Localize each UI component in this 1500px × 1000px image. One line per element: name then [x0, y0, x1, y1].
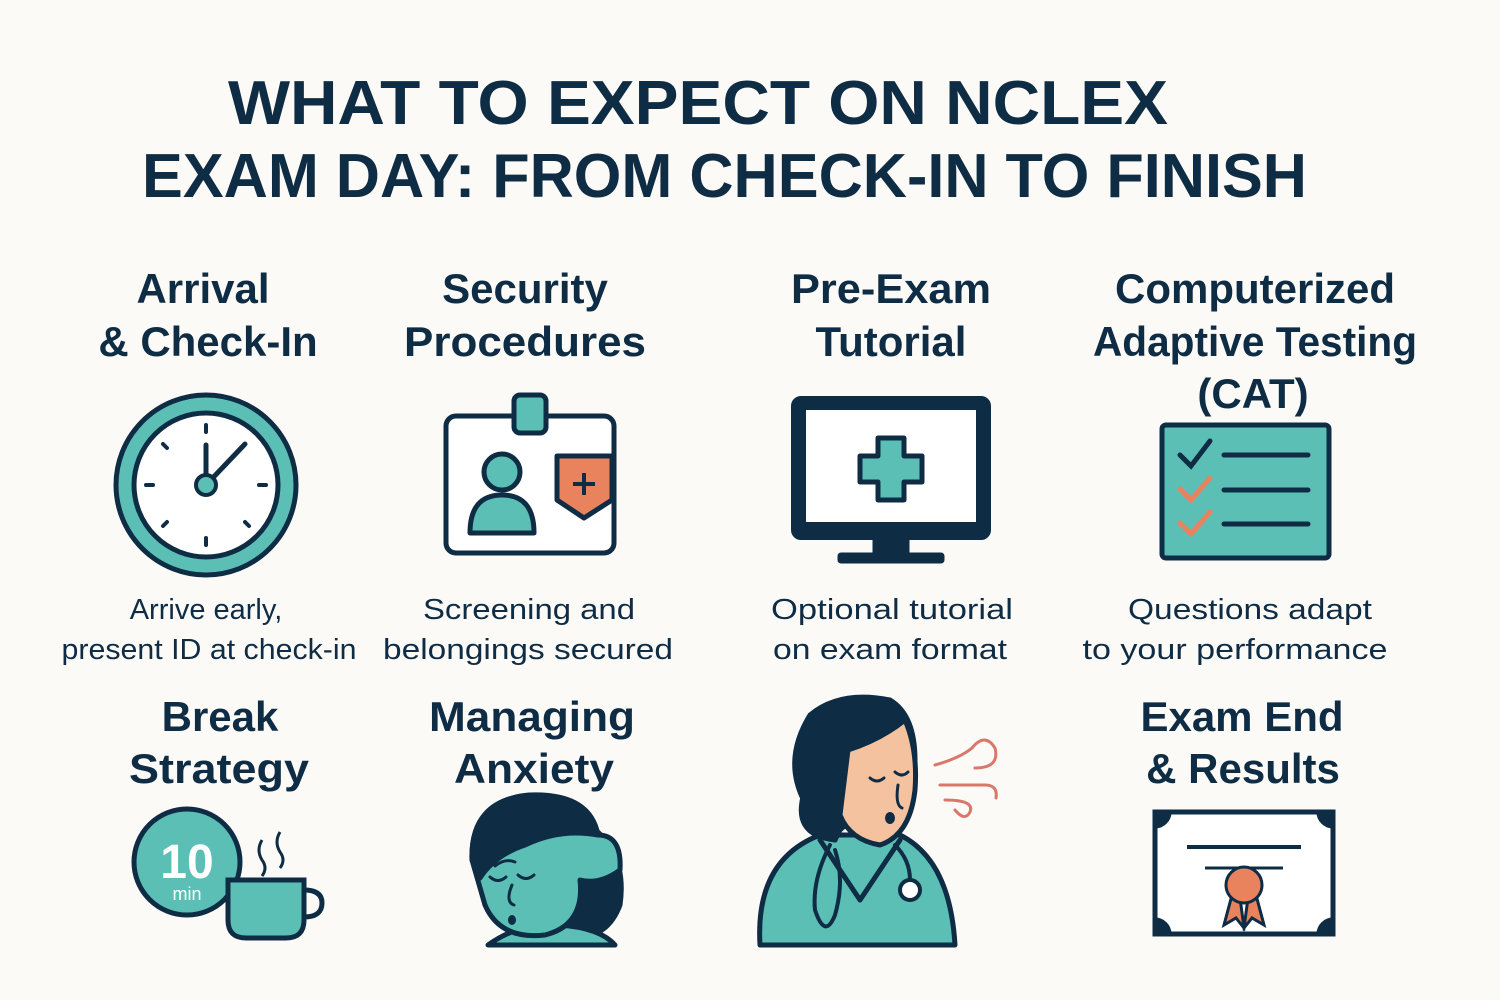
heading: anxiety: Managing — [429, 693, 635, 740]
heading: arrival: Arrival — [136, 265, 270, 312]
heading: arrival — [98, 265, 318, 365]
heading: security: Security — [442, 265, 609, 312]
text: tutorial: on exam format — [773, 634, 1007, 666]
heading: CAT — [1093, 265, 1417, 417]
heading: anxiety — [429, 693, 635, 792]
icon: nurse breathing — [760, 697, 996, 945]
heading: security: Procedures — [404, 318, 646, 365]
heading: tutorial — [791, 265, 991, 365]
heading: break: Break — [162, 693, 279, 740]
text: security — [383, 594, 673, 666]
icon: certificate — [1155, 812, 1333, 934]
text: arrival: present ID at check-in — [62, 634, 356, 666]
text: arrival — [62, 594, 356, 666]
heading: arrival: & Check-In — [98, 318, 318, 365]
heading: CAT: (CAT) — [1197, 370, 1309, 417]
heading: CAT: Computerized — [1115, 265, 1395, 312]
heading: tutorial: Pre-Exam — [791, 265, 991, 312]
icon: 10 min timer and cup — [134, 809, 322, 938]
text: CAT — [1082, 594, 1388, 666]
heading: anxiety: Anxiety — [454, 745, 615, 792]
title — [142, 69, 1307, 211]
icon: clock — [116, 395, 296, 575]
text: security: Screening and — [423, 594, 635, 626]
icon: checklist — [1162, 425, 1329, 558]
heading: CAT: Adaptive Testing — [1093, 318, 1417, 365]
text: arrival: Arrive early, — [130, 594, 282, 626]
text: tutorial — [771, 594, 1013, 666]
heading: tutorial: Tutorial — [816, 318, 966, 365]
heading: break — [129, 693, 310, 792]
text: CAT: Questions adapt — [1128, 594, 1372, 626]
icon: ID badge — [446, 395, 614, 553]
heading: exam end: & Results — [1146, 745, 1340, 792]
title: WHAT TO EXPECT ON NCLEX — [228, 69, 1168, 138]
text: security: belongings secured — [383, 634, 673, 666]
icon: monitor — [793, 398, 989, 563]
title: EXAM DAY: FROM CHECK-IN TO FINISH — [142, 142, 1307, 211]
text: tutorial: Optional tutorial — [771, 594, 1013, 626]
text: CAT: to your performance — [1082, 634, 1388, 666]
heading: exam end — [1140, 693, 1344, 792]
heading: break: Strategy — [129, 745, 310, 792]
icon: anxious face — [472, 795, 621, 945]
icon: 10 min timer and cup: 10 — [160, 836, 214, 889]
heading: exam end: Exam End — [1140, 693, 1344, 740]
heading: security — [404, 265, 646, 365]
icon: 10 min timer and cup: min — [172, 884, 202, 904]
